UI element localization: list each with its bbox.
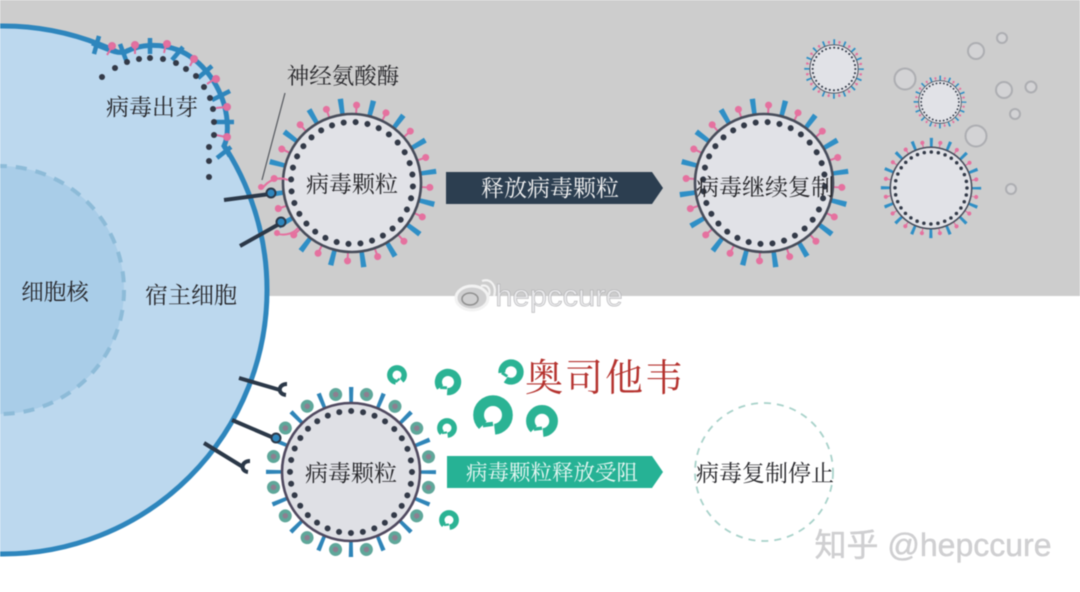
- virus continuing replication: [660, 79, 868, 287]
- label: virus particle: 病毒颗粒: [306, 172, 398, 197]
- label: virus particle (blocked): 病毒颗粒: [305, 461, 397, 486]
- label: virus continues replicating: 病毒继续复制: [696, 175, 834, 200]
- icon: weibo logo: [456, 280, 495, 310]
- small virus 2: [912, 74, 968, 130]
- label: nucleus: 细胞核: [21, 280, 90, 305]
- virus particle attached to the cell: [248, 79, 456, 287]
- label: viral budding: 病毒出芽: [106, 95, 198, 120]
- lower receptors: [204, 378, 287, 472]
- label: host cell: 宿主细胞: [145, 283, 237, 308]
- label: replication stops: 病毒复制停止: [696, 461, 834, 486]
- receptor head binding the virus: [272, 434, 280, 442]
- budding bulge of the cell membrane: [90, 43, 230, 156]
- arrow: release of virus particles: 释放病毒颗粒: [481, 176, 619, 201]
- oseltamivir molecules: [389, 362, 558, 530]
- drug name: oseltamivir: 奥司他韦: [525, 358, 685, 400]
- budding spikes: [94, 36, 234, 158]
- cell nucleus: [0, 166, 124, 414]
- arrow: release of virus particles: [446, 172, 663, 204]
- label: neuraminidase: 神经氨酸酶: [287, 64, 399, 89]
- host cell: [0, 26, 267, 554]
- arrow: particle release blocked: 病毒颗粒释放受阻: [466, 461, 638, 485]
- background: upper grey region: [0, 0, 1080, 296]
- watermark: weibo: hepccure: [495, 278, 623, 313]
- watermark: zhihu: 知乎 @hepccure: [814, 527, 1052, 563]
- budding pink spikes: [107, 41, 230, 140]
- leader line for neuraminidase: [262, 93, 285, 180]
- budding capsid dots: [99, 55, 217, 180]
- arrow: particle release blocked: [447, 456, 663, 488]
- virus particle blocked at the cell: [258, 379, 444, 565]
- dashed ghost virus: [695, 403, 833, 541]
- small virus 1: [802, 37, 866, 101]
- medium virus: [877, 134, 985, 242]
- empty bubbles: [894, 33, 1036, 194]
- top receptors cleaving the virus: [224, 178, 298, 246]
- background: lower white region: [0, 296, 1080, 592]
